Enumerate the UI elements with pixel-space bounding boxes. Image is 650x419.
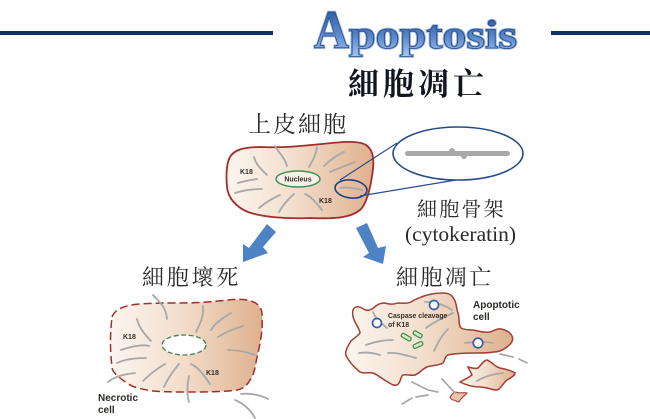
magnified filament <box>405 148 510 159</box>
internal filaments <box>359 302 493 358</box>
K18 label: K18 <box>319 198 332 205</box>
title: Apoptosis: A <box>314 0 349 60</box>
arrow: to necrosis <box>243 224 276 262</box>
title: Apoptosis: poptosis <box>349 12 517 57</box>
cleavage circles <box>372 300 483 348</box>
green fragments <box>401 330 423 349</box>
label: apoptotic cell: cell <box>473 312 490 323</box>
loose filament fragments <box>402 354 527 404</box>
keratin filaments <box>235 146 362 212</box>
hollow nucleus <box>162 335 206 355</box>
subtitle: apoptosis in Chinese: 細胞凋亡 <box>348 67 488 102</box>
cell body <box>226 142 373 218</box>
header rule left <box>0 31 273 35</box>
nucleus: Nucleus <box>284 176 312 184</box>
fragment: small bleb <box>460 360 515 390</box>
apoptotic cell diagram <box>346 293 527 404</box>
zoom callout: cytokeratin filament <box>334 127 523 200</box>
arrow: to apoptosis <box>356 223 386 264</box>
title: Apoptosis: A <box>314 0 349 60</box>
label: epithelial cell: 上皮細胞 <box>248 112 348 137</box>
filaments <box>108 295 268 418</box>
large magnified ellipse <box>393 127 523 180</box>
label: caspase cleavage: of K18 <box>388 322 409 329</box>
label: apoptosis: 細胞凋亡 <box>396 265 494 290</box>
label: cytokeratin: (cytokeratin) <box>405 222 516 246</box>
title: Apoptosis: poptosis <box>349 12 517 57</box>
main blebbing body <box>346 293 513 385</box>
label: cytoskeleton: 細胞骨架 <box>417 198 506 221</box>
header rule right <box>551 31 650 35</box>
small selection ellipse <box>334 178 368 200</box>
label: necrotic cell: Necrotic <box>98 393 138 404</box>
label: caspase cleavage: Caspase cleavage <box>388 313 447 320</box>
connector lines <box>340 143 462 196</box>
K18 label: K18 <box>123 334 136 341</box>
K18 label: K18 <box>240 169 253 176</box>
healthy cell diagram <box>226 142 373 218</box>
label: necrotic cell: cell <box>98 405 115 416</box>
title: Apoptosis <box>314 0 517 60</box>
leaky cell body <box>110 299 262 392</box>
label: apoptotic cell: Apoptotic <box>473 300 520 311</box>
label: necrosis: 細胞壞死 <box>142 265 241 290</box>
K18 label: K18 <box>206 370 219 377</box>
fragment: tiny bleb <box>450 392 467 402</box>
nucleus <box>276 171 320 187</box>
necrotic cell diagram <box>98 295 268 418</box>
